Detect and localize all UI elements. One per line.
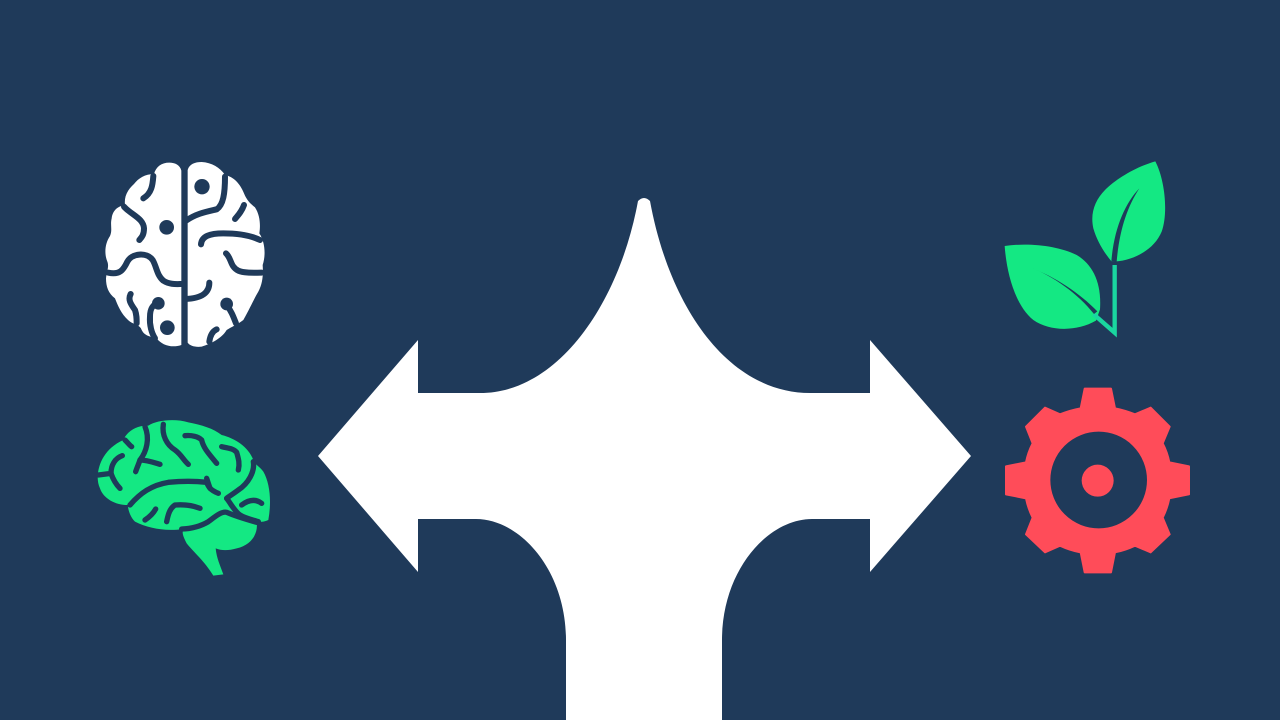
- icon: green side-view brain: [98, 420, 270, 576]
- upper leaf: [1092, 161, 1165, 262]
- arrow: three-way fork pointing left, right and up: [318, 198, 971, 720]
- leaf veins: [1111, 188, 1139, 262]
- icon: green sprout with two leaves: [1005, 161, 1165, 333]
- icon: red gear: [1006, 389, 1189, 572]
- icon: white circuit brain: [105, 162, 265, 347]
- stem: [1093, 265, 1115, 333]
- lower leaf: [1005, 245, 1100, 329]
